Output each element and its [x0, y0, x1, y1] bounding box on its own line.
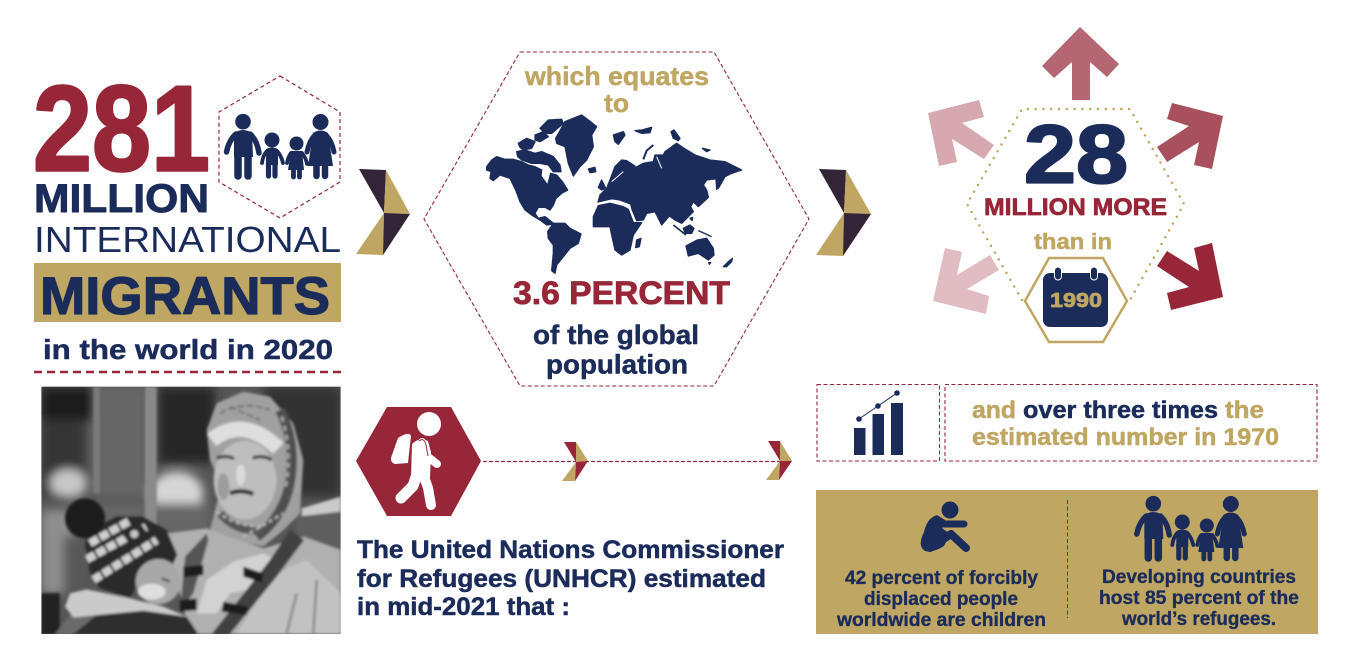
panel: over three times: the — [1225, 397, 1264, 424]
arrow: chevron one — [356, 169, 410, 255]
panel: over three times: and — [972, 397, 1016, 424]
text: which equates to: which equates — [524, 61, 709, 91]
arrow: dashed connector with small chevrons — [483, 441, 792, 481]
icon: family — [1137, 496, 1244, 559]
arrow: lower right — [1157, 243, 1223, 310]
arrow: upper left — [928, 100, 994, 166]
text: in the world in 2020: in the world in 2020 — [43, 334, 333, 365]
text: of the global population: population — [546, 350, 688, 380]
text: which equates to — [524, 61, 709, 118]
heading: MILLION: MILLION — [34, 177, 209, 221]
icon: rising bar chart in dashed box — [817, 384, 940, 461]
icon: calendar 1990 in hexagon — [1025, 258, 1127, 342]
baby hat and pompon — [85, 517, 177, 598]
icon: seated child — [921, 502, 966, 551]
panel: over three times — [945, 384, 1317, 461]
text: 28: 28 — [1024, 108, 1128, 200]
photo: mother and baby (grayscale) — [41, 387, 341, 634]
arrow: chevron two — [816, 169, 871, 256]
panel: over three times: estimated number in 1970 — [972, 424, 1279, 451]
text: developing countries host 85 percent: world’s refugees. — [1121, 609, 1276, 630]
text: than in: than in — [1034, 229, 1112, 254]
text: UNHCR estimate — [357, 536, 784, 621]
icon: calendar 1990 in hexagon: 1990 — [1050, 290, 1102, 312]
heading: 281: 281 — [33, 60, 210, 196]
face — [214, 441, 276, 519]
text: UNHCR estimate: The United Nations Commissioner — [357, 536, 784, 564]
text: 42 percent of forcibly displaced: worldwide are children — [836, 610, 1046, 631]
text: developing countries host 85 percent: host 85 percent of the — [1099, 588, 1299, 609]
panel: children and refugees — [816, 490, 1318, 634]
text: 42 percent of forcibly displaced: 42 percent of forcibly — [845, 568, 1038, 589]
text: of the global population: of the global — [533, 320, 699, 350]
panel: over three times: over three times — [1023, 397, 1218, 424]
baby face — [136, 559, 181, 604]
panel: 281 million headline — [33, 60, 341, 372]
panel: world share hexagon — [424, 52, 809, 386]
text: MILLION MORE: MILLION MORE — [984, 194, 1167, 221]
text: developing countries host 85 percent: Developing countries — [1102, 567, 1296, 588]
text: UNHCR estimate: for Refugees (UNHCR) estimated — [357, 565, 766, 593]
text: 42 percent of forcibly displaced — [836, 568, 1046, 631]
text: of the global population — [533, 320, 699, 380]
text: UNHCR estimate: in mid-2021 that : — [357, 593, 570, 621]
straps — [180, 533, 208, 610]
panel: 28 million more — [928, 27, 1223, 342]
text: 42 percent of forcibly displaced: displaced people — [864, 589, 1018, 610]
icon: red hexagon with walking migrant — [356, 407, 481, 516]
banner: MIGRANTS: MIGRANTS — [40, 267, 330, 326]
arrow: lower left — [933, 248, 999, 314]
icon: world map — [487, 115, 742, 273]
text: 3.6 PERCENT: 3.6 PERCENT — [513, 275, 730, 311]
icon: small chevron two — [766, 441, 792, 480]
text: which equates to: to — [604, 88, 629, 118]
arrow: up — [1042, 27, 1119, 100]
arrow: upper right — [1157, 103, 1223, 169]
heading: INTERNATIONAL: INTERNATIONAL — [34, 219, 341, 260]
icon: small chevron one — [562, 442, 588, 481]
text: developing countries host 85 percent — [1099, 567, 1299, 630]
baby jacket — [74, 612, 199, 634]
icon: family in dashed hexagon — [219, 76, 340, 218]
hijab — [207, 392, 303, 547]
coat — [167, 528, 341, 634]
